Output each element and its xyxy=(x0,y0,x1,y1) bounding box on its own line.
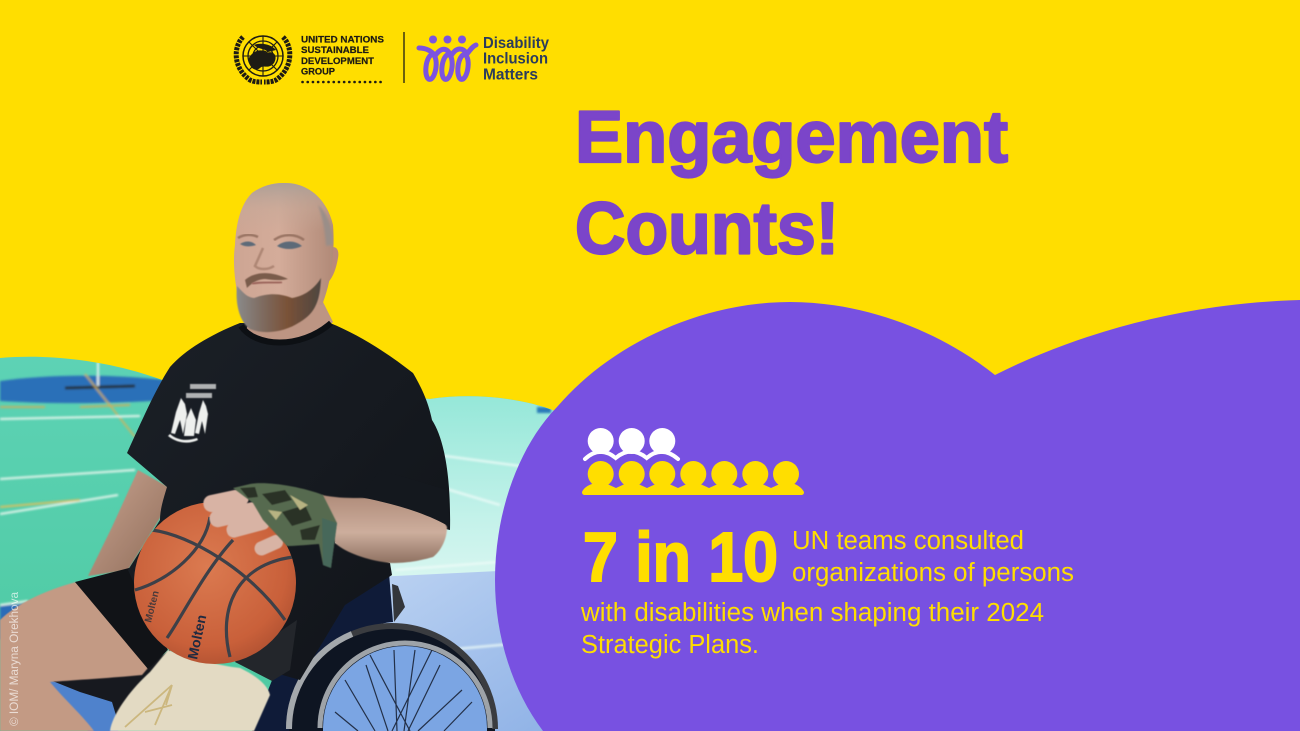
ear xyxy=(326,247,338,284)
left arm xyxy=(88,470,170,576)
statistic description xyxy=(580,527,1074,659)
SDG name xyxy=(301,34,385,78)
purple statistics panel xyxy=(495,300,1300,731)
wordmark: Matters xyxy=(483,66,538,84)
basketball xyxy=(134,502,296,664)
logo: United Nations Sustainable Development Group xyxy=(236,34,385,82)
seat under the leg xyxy=(50,648,172,722)
sleeve edge xyxy=(360,470,450,527)
logo: Disability Inclusion Matters xyxy=(419,35,549,84)
sports court photo backdrop xyxy=(0,340,560,731)
neck xyxy=(246,296,333,340)
SDG name: DEVELOPMENT xyxy=(301,56,374,67)
basketball: Molten xyxy=(184,613,209,661)
nose shadow xyxy=(255,248,274,269)
thigh and leg xyxy=(0,582,148,731)
prosthetic leg xyxy=(110,650,270,731)
wordmark xyxy=(483,35,549,84)
shirt print xyxy=(168,384,216,443)
SDG name: SUSTAINABLE xyxy=(301,45,370,56)
statistic description: Strategic Plans. xyxy=(581,631,759,659)
headline statistic: 7 in 10 xyxy=(583,518,778,596)
ball markings: Molten xyxy=(143,590,162,624)
icon: UN emblem xyxy=(236,36,290,82)
icon: seven people, three highlighted xyxy=(582,428,804,495)
beard xyxy=(237,278,321,332)
dotted rule xyxy=(302,81,384,83)
wheel with spokes xyxy=(289,626,495,731)
highlighted three people xyxy=(585,428,678,459)
cropped hair shading xyxy=(234,183,334,305)
face xyxy=(234,183,334,305)
yellow row of people xyxy=(582,461,804,495)
black shorts xyxy=(75,567,168,669)
wheelchair frame xyxy=(252,573,393,731)
statistic description: organizations of persons xyxy=(792,559,1074,587)
title: Engagement xyxy=(575,97,1008,178)
head xyxy=(234,183,338,332)
eyes xyxy=(240,241,302,249)
title xyxy=(575,97,1008,270)
statistic description: UN teams consulted xyxy=(792,527,1024,555)
statistic description: with disabilities when shaping their 2024 xyxy=(580,599,1044,627)
title: Counts! xyxy=(575,188,839,270)
prosthetic pattern xyxy=(125,685,172,727)
camouflage glove xyxy=(233,483,337,568)
photo: man in a wheelchair with a basketball xyxy=(0,183,495,731)
photo credit: © IOM/ Maryna Orekhova xyxy=(9,591,21,726)
spokes behind the leg xyxy=(45,678,135,731)
icon: three linked figures xyxy=(419,36,476,80)
wordmark: Inclusion xyxy=(483,50,548,68)
moustache and mouth xyxy=(245,273,288,288)
fingers xyxy=(202,487,285,558)
neckline xyxy=(241,323,331,342)
SDG name: UNITED NATIONS xyxy=(301,34,385,46)
logo divider xyxy=(403,32,405,83)
temple shading xyxy=(318,205,333,246)
wordmark: Disability xyxy=(483,35,549,52)
shorts behind the ball xyxy=(235,620,297,681)
right forearm xyxy=(322,495,447,563)
black t-shirt xyxy=(127,323,450,680)
SDG name: GROUP xyxy=(301,66,336,78)
